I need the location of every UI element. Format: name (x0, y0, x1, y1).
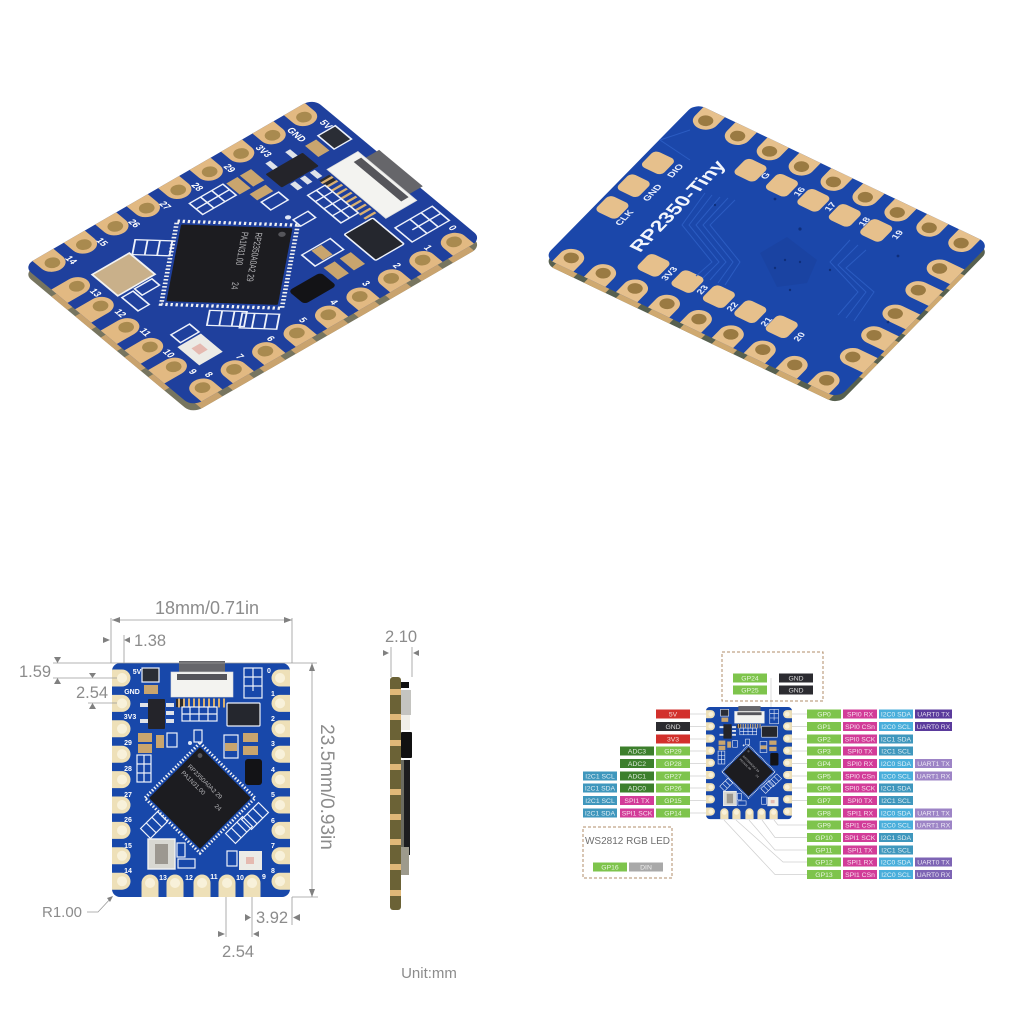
pin labels: back photo: 17 (822, 201, 839, 213)
pin labels: dimension board: 0 (267, 668, 271, 675)
pinout: right pin labels: I2C1 SCL (881, 848, 911, 854)
pin labels: dimension board: 8 (271, 868, 275, 875)
dimension drawing: top view of the board (104, 661, 298, 905)
pinout: right pin labels: SPI1 CSn (845, 872, 875, 879)
pinout: left pin labels: I2C1 SCL (585, 774, 615, 780)
pin labels: dimension board: 13 (159, 875, 167, 882)
pinout: right pin labels: I2C0 SCL (881, 872, 911, 879)
pinout: left pin labels: I2C1 SDA (585, 786, 616, 792)
pinout: right pin labels: SPI0 CSn (845, 724, 875, 731)
callout: WS2812 RGB LED: GP16 (601, 864, 619, 872)
pin labels: back photo: 22 (724, 301, 741, 313)
dimension annotations: 3.92 (256, 909, 288, 927)
pinout: right pin labels: GP10 (815, 835, 833, 842)
pinout: right pin labels: I2C0 SDA (881, 860, 912, 866)
pinout: right pin labels: SPI1 RX (847, 860, 873, 866)
photo: back of the RP2350-Tiny board (537, 96, 1006, 416)
pinout: right pin labels: SPI0 TX (847, 748, 873, 756)
pinout: right pin labels: I2C0 SDA (881, 712, 912, 718)
pinout: right pin labels: SPI1 SCK (845, 835, 876, 842)
pin labels: front photo: 3 (359, 279, 372, 288)
pinout: right pin labels: GP3 (817, 748, 831, 756)
dimension drawing: side view (383, 628, 419, 910)
pin labels: dimension board: 12 (185, 875, 193, 882)
pinout: right pin labels: I2C0 SDA (881, 761, 912, 768)
callout: GP24 and GP25 (722, 652, 823, 701)
pin labels: front photo (54, 111, 463, 384)
pin labels: back photo: 19 (889, 229, 906, 241)
pinout: right pin labels: I2C1 SDA (881, 736, 912, 744)
pinout: right pin labels: I2C1 SDA (881, 835, 912, 842)
pin labels: dimension board: 14 (124, 868, 132, 875)
pin labels: front photo: 11 (137, 327, 153, 338)
pinout: right pin labels: GP2 (817, 736, 831, 744)
callout: GP24 and GP25: GP24 (741, 676, 759, 682)
pinout: right pin labels: I2C1 SCL (881, 798, 911, 805)
pinout: right pin labels: UART1 TX (917, 810, 950, 818)
dimension annotations: 1.38 (134, 632, 166, 650)
pinout: right pin labels: GP6 (817, 786, 831, 792)
height label: 23.5mm/0.93in (316, 724, 337, 850)
pinout: right pin labels: UART1 TX (917, 761, 950, 768)
pin labels: back photo: 3V3 (659, 266, 680, 282)
pinout: right pin labels: GP8 (817, 810, 831, 818)
pinout: left pin labels: ADC3 (628, 748, 646, 756)
pinout: right pin labels: SPI1 CSn (845, 822, 875, 830)
pin labels: front photo: 14 (63, 254, 80, 266)
pinout: right pin labels: GP0 (817, 712, 831, 718)
callout: WS2812 RGB LED: WS2812 RGB LED (585, 836, 670, 847)
pin labels: dimension board: 29 (124, 740, 132, 747)
pinout: right pin labels: SPI1 TX (847, 848, 873, 854)
pin labels: front photo: 1 (421, 243, 434, 252)
pinout: right pin labels: GP11 (816, 848, 833, 854)
vias (714, 198, 899, 323)
pinout: right pin labels: I2C1 SDA (881, 786, 912, 792)
pin labels: back photo: 16 (791, 186, 808, 198)
pin labels: front photo: GND (284, 126, 309, 144)
pinout: left pin labels: 3V3 (667, 736, 679, 744)
pin labels: back photo: 21 (758, 316, 775, 328)
pinout: right pin labels: SPI0 RX (847, 761, 873, 768)
pinout: right pin labels (807, 710, 952, 879)
pinout: right pin labels: GP1 (817, 724, 831, 731)
pin labels: back photo: 20 (791, 331, 808, 343)
pinout: right pin labels: GP4 (817, 761, 831, 768)
pinout: right pin labels: UART0 RX (917, 724, 951, 731)
pinout: right pin labels: GP7 (817, 798, 831, 805)
pin labels: back photo: GND (641, 183, 664, 203)
pinout: left pin labels: GP28 (664, 761, 682, 768)
pin labels: front photo: 13 (87, 287, 104, 298)
pin labels: back photo: DIO (665, 163, 686, 179)
pin labels: back photo (613, 163, 906, 343)
pinout: left pin labels: ADC2 (628, 761, 646, 768)
pin labels: back photo: G (758, 171, 772, 181)
pinout: right pin labels: UART0 TX (917, 712, 950, 718)
pin labels: dimension board: 11 (210, 874, 218, 881)
pin labels: front photo: 9 (186, 368, 199, 376)
pin labels: dimension board: 1 (271, 691, 275, 698)
pinout: right pin labels: UART0 TX (917, 860, 950, 866)
product name: RP2350-Tiny (625, 158, 731, 255)
pinout: right pin labels: I2C0 SCL (881, 774, 911, 780)
callout: GP24 and GP25: GND (788, 688, 804, 694)
pinout: small board (702, 706, 796, 823)
pinout: right pin labels: UART1 RX (917, 774, 951, 780)
pinout: left pin labels: GP27 (664, 774, 682, 780)
pinout: left pin labels: I2C1 SCL (585, 798, 615, 805)
pinout: left pin labels: GP29 (664, 748, 682, 756)
pin labels: dimension board: 10 (236, 875, 244, 882)
pinout: left pin labels: GP14 (664, 810, 682, 818)
pinout: right pin labels: I2C0 SCL (881, 822, 911, 830)
pinout: left pin labels: SPI1 TX (624, 798, 650, 805)
pinout: left pin labels: ADC0 (628, 786, 646, 792)
pin labels: dimension board: 28 (124, 766, 132, 773)
pin labels: dimension board (124, 668, 275, 882)
pinout: left pin labels: SPI1 SCK (622, 810, 653, 818)
callout: WS2812 RGB LED: DIN (640, 864, 652, 872)
pin labels: front photo: 3V3 (253, 144, 274, 159)
pin labels: front photo: 5 (296, 316, 309, 324)
pinout: left pin labels: GND (665, 724, 681, 731)
dimension annotations: 2.54 (222, 943, 254, 961)
pinout: left pin labels: GP26 (664, 786, 682, 792)
dimension annotations: R1.00 (42, 904, 82, 921)
pin labels: dimension board: 15 (124, 843, 132, 850)
pin labels: front photo: 5V (317, 118, 335, 131)
square test pads (569, 124, 895, 340)
dimension annotations: 2.54 (76, 684, 108, 702)
pinout: left pin labels: I2C1 SDA (585, 810, 616, 818)
pin labels: front photo: 0 (446, 224, 459, 232)
pinout: left pin labels: 5V (669, 712, 678, 718)
pinout: left pin labels: GP15 (664, 798, 682, 805)
pinout: right pin labels: GP9 (817, 822, 831, 830)
pinout: right pin labels: UART0 RX (917, 872, 951, 879)
pinout: right pin labels: I2C1 SCL (881, 748, 911, 756)
pinout: right pin labels: SPI0 SCK (845, 786, 876, 792)
pin labels: front photo: 4 (327, 298, 341, 307)
pinout: right pin labels: I2C0 SCL (881, 724, 911, 731)
pinout: leader lines (690, 678, 807, 874)
pin labels: dimension board: 4 (271, 767, 275, 774)
pinout: right pin labels: GP12 (815, 860, 833, 866)
pin labels: front photo: 26 (126, 218, 142, 229)
dimension annotations (19, 598, 337, 961)
pinout: right pin labels: SPI0 TX (847, 798, 873, 805)
pin labels: dimension board: 3 (271, 741, 275, 748)
pin labels: front photo: 12 (112, 307, 129, 319)
pinout: left pin labels (583, 710, 690, 818)
pin labels: back photo: 23 (694, 284, 711, 296)
pin labels: dimension board: 5 (271, 792, 275, 799)
pin labels: front photo: 6 (264, 334, 277, 343)
pin labels: front photo: 2 (390, 261, 403, 270)
pin labels: front photo: 8 (202, 370, 215, 379)
callout: GP24 and GP25: GND (788, 676, 804, 682)
dimension drawing: side view: 2.10 (385, 628, 417, 646)
width label: 18mm/0.71in (155, 598, 259, 618)
pin labels: dimension board: 3V3 (124, 714, 136, 721)
pin labels: back photo: CLK (613, 208, 636, 227)
photo: front of the RP2350-Tiny board (6, 91, 492, 426)
callout: GP24 and GP25: GP25 (741, 688, 759, 694)
pin labels: dimension board: GND (124, 689, 140, 696)
pin labels: dimension board: 7 (271, 843, 275, 850)
pinout: right pin labels: SPI0 RX (847, 712, 873, 718)
pinout: right pin labels: SPI1 RX (847, 810, 873, 818)
pin labels: dimension board: 2 (271, 716, 275, 723)
pin labels: dimension board: 9 (262, 874, 266, 881)
unit note: Unit:mm (401, 965, 457, 982)
pin labels: front photo: 27 (157, 200, 173, 211)
callout: WS2812 RGB LED (583, 827, 672, 878)
pin labels: back photo: 18 (856, 216, 873, 228)
pin labels: front photo: 10 (160, 348, 177, 359)
pin labels: front photo: 15 (94, 236, 110, 248)
pinout: right pin labels: I2C0 SDA (881, 810, 912, 818)
pin labels: dimension board: 6 (271, 818, 275, 825)
pinout: right pin labels: UART1 RX (917, 822, 951, 830)
pin labels: dimension board: 5V (133, 669, 142, 676)
pin labels: dimension board: 26 (124, 817, 132, 824)
pin labels: front photo: 7 (233, 352, 246, 361)
pin labels: front photo: 28 (189, 181, 206, 193)
pinout: right pin labels: GP13 (815, 872, 833, 879)
dimension annotations: 1.59 (19, 663, 51, 681)
pin labels: front photo: 29 (221, 162, 238, 174)
copper traces (660, 130, 874, 321)
pin labels: dimension board: 27 (124, 792, 132, 799)
pinout: right pin labels: GP5 (817, 774, 831, 780)
pinout: right pin labels: SPI0 CSn (845, 774, 875, 780)
pinout: right pin labels: SPI0 SCK (845, 736, 876, 744)
pinout: left pin labels: ADC1 (628, 774, 646, 780)
